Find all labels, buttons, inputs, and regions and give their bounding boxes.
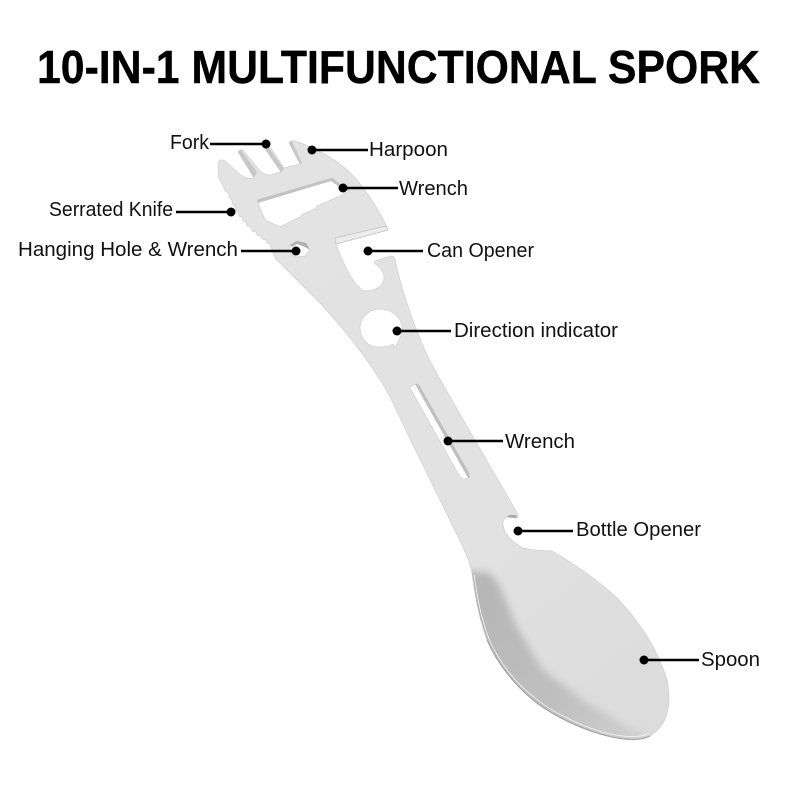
title: 10-IN-1 MULTIFUNCTIONAL SPORK bbox=[37, 41, 760, 93]
label: Can Opener bbox=[364, 240, 534, 262]
hanging hole bevel bbox=[290, 241, 310, 250]
label: Wrench slot bbox=[444, 431, 575, 453]
label: Wrench top bbox=[338, 178, 468, 200]
spork body bbox=[218, 141, 669, 740]
label: Wrench slot: Wrench bbox=[505, 431, 575, 453]
can opener ledge bbox=[335, 226, 388, 244]
label: Serrated Knife bbox=[49, 199, 236, 221]
label: Spoon: Spoon bbox=[701, 649, 760, 671]
spork illustration bbox=[218, 141, 669, 755]
label: Spoon bbox=[640, 649, 760, 671]
spoon shading bbox=[472, 568, 644, 739]
label: Serrated Knife: Serrated Knife bbox=[49, 199, 173, 221]
label: Fork bbox=[170, 132, 270, 154]
label: Harpoon: Harpoon bbox=[369, 139, 448, 161]
bottle opener bevel bbox=[507, 515, 517, 518]
label: Bottle Opener: Bottle Opener bbox=[576, 519, 701, 541]
label: Fork: Fork bbox=[170, 132, 210, 154]
label: Hanging Hole and Wrench: Hanging Hole & Wrench bbox=[18, 239, 238, 261]
tine bevels bbox=[238, 141, 302, 178]
label: Direction indicator: Direction indicator bbox=[454, 320, 618, 342]
label: Bottle Opener bbox=[514, 519, 701, 541]
slot bevel bbox=[415, 384, 470, 478]
label: Harpoon bbox=[308, 139, 448, 161]
label: Wrench top: Wrench bbox=[399, 178, 468, 200]
label: Can Opener: Can Opener bbox=[427, 240, 534, 262]
spoon rim bbox=[474, 575, 649, 737]
wrench window bevel bbox=[257, 178, 349, 203]
